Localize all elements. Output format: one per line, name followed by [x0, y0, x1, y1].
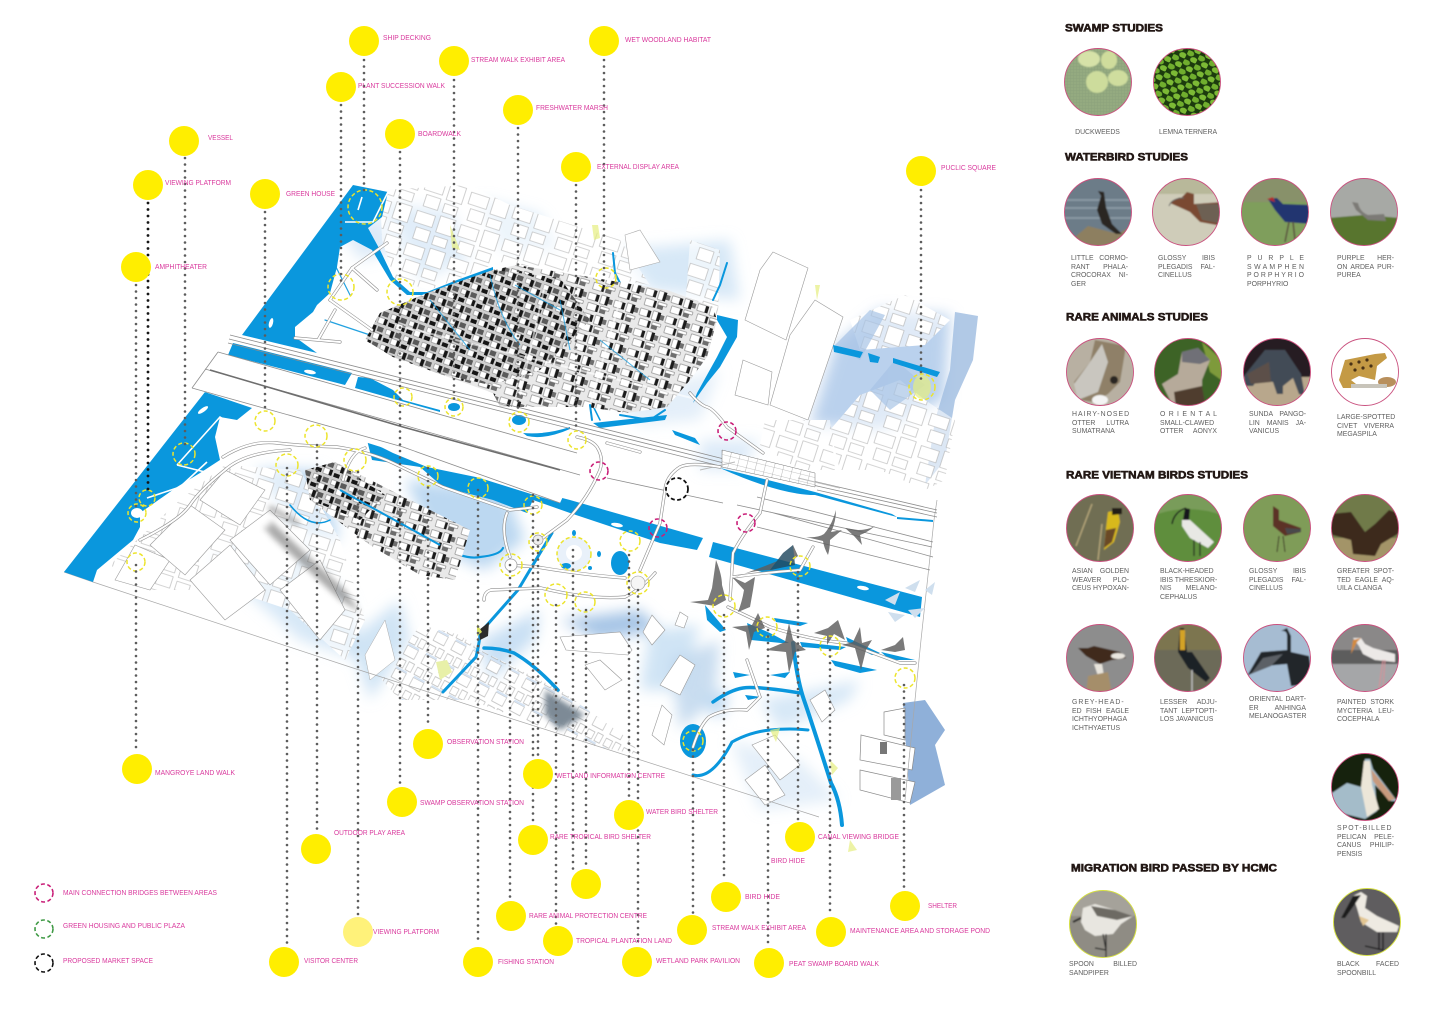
large white towers — [735, 252, 843, 420]
photo: oriental small-clawed otter — [1154, 338, 1222, 406]
caption: painted stork — [1337, 699, 1394, 723]
label: bird hide upper: BIRD HIDE — [771, 858, 805, 865]
caption: sunda pangolin: LIN MANIS JA- — [1249, 420, 1306, 427]
caption: greater spotted eagle: UILA CLANGA — [1337, 585, 1382, 592]
callout: plant succession walk: PLANT SUCCESSION WALK — [358, 83, 445, 90]
soft building shadows — [210, 200, 950, 810]
callout: visitor center: VISITOR CENTER — [304, 958, 358, 965]
callout: stream walk exhibit area — [439, 46, 565, 76]
water: canals and tributaries — [290, 253, 842, 825]
caption: glossy ibis: CINELLUS — [1158, 272, 1192, 279]
callout: viewing platform lower — [343, 917, 439, 947]
caption: black-headed ibis: CEPHALUS — [1160, 594, 1197, 601]
callout: wetland information centre — [523, 759, 665, 789]
yellow-green highlight areas — [450, 225, 931, 852]
caption: glossy ibis second: PLEGADIS FAL- — [1249, 577, 1306, 584]
callout: canal viewing bridge — [785, 822, 899, 852]
callout: rare animal protection centre — [496, 901, 647, 931]
caption: greater spotted eagle: GREATER SPOT- — [1337, 568, 1394, 575]
photo: painted stork — [1331, 624, 1399, 692]
caption: grey-headed fish eagle: ED FISH EAGLE — [1072, 708, 1129, 715]
callout: plant succession walk — [326, 72, 445, 102]
caption: black faced spoonbill — [1337, 961, 1399, 977]
caption: oriental small-clawed otter: OTTER AONYX — [1160, 428, 1217, 435]
caption: little cormorant: RANT PHALA- — [1071, 264, 1128, 271]
callout: amphitheater — [121, 252, 207, 282]
caption: lemna ternera: LEMNA TERNERA — [1159, 129, 1217, 136]
dashed markers: main connection bridges — [590, 422, 755, 537]
caption: painted stork: COCEPHALA — [1337, 716, 1380, 723]
callout: amphitheater: AMPHITHEATER — [155, 264, 207, 271]
caption: spot-billed pelican — [1337, 825, 1394, 858]
heading: migration birds: MIGRATION BIRD PASSED BY HCMC — [1071, 862, 1277, 874]
caption: lesser adjutant: LESSER ADJU- — [1160, 699, 1217, 706]
caption: black faced spoonbill: SPOONBILL — [1337, 970, 1376, 977]
callout: stream walk exhibit area lower — [677, 915, 806, 945]
water: north-west lagoon — [242, 185, 493, 353]
caption: grey-headed fish eagle: GREY-HEAD- — [1072, 699, 1125, 706]
caption: hairy-nosed otter: OTTER LUTRA — [1072, 420, 1129, 427]
caption: spoon billed sandpiper — [1069, 961, 1137, 977]
callout: viewing platform lower: VIEWING PLATFORM — [373, 929, 439, 936]
caption: spoon billed sandpiper: SANDPIPER — [1069, 970, 1109, 977]
pavilion arc — [560, 632, 632, 655]
water: central river — [367, 440, 703, 550]
callout: public square — [906, 156, 996, 186]
callout: vessel — [169, 126, 233, 156]
panel: species studies sidebar — [1062, 22, 1403, 960]
legend — [35, 884, 217, 972]
white boats — [131, 318, 869, 591]
heading: rare vietnam birds studies: RARE VIETNAM BIRDS STUDIES — [1066, 470, 1248, 482]
caption: greater spotted eagle — [1337, 568, 1394, 592]
callout: vessel: VESSEL — [208, 135, 233, 142]
caption: lesser adjutant: LOS JAVANICUS — [1160, 716, 1213, 723]
callout: stream walk exhibit area: STREAM WALK EXHIBIT AREA — [471, 57, 565, 64]
callout: peat swamp board walk: PEAT SWAMP BOARD WALK — [789, 961, 879, 968]
callout: peat swamp board walk — [754, 948, 879, 978]
caption: sunda pangolin: SUNDA PANGO- — [1249, 411, 1306, 418]
caption: grey-headed fish eagle: ICHTHYOPHAGA — [1072, 716, 1127, 723]
caption: lesser adjutant: TANT LEPTOPTI- — [1160, 708, 1217, 715]
callout: water bird shelter — [614, 800, 718, 830]
caption: asian golden weaver: CEUS HYPOXAN- — [1072, 585, 1129, 592]
caption: oriental small-clawed otter: SMALL-CLAWED — [1160, 420, 1214, 427]
water: thin strip by road — [355, 377, 440, 412]
callout: bird hide — [711, 882, 780, 912]
callout: rare tropical bird shelter — [518, 825, 651, 855]
caption: glossy ibis — [1158, 255, 1215, 279]
callout: fishing station: FISHING STATION — [498, 959, 554, 966]
callout: boardwalk — [385, 119, 461, 149]
caption: purple heron: PURPLE HER- — [1337, 255, 1394, 262]
leader lines — [136, 60, 921, 945]
caption: spot-billed pelican: CANUS PHILIP- — [1337, 842, 1394, 849]
callout: green house — [250, 179, 335, 209]
photo: hairy-nosed otter — [1066, 338, 1134, 406]
caption: oriental darter — [1249, 696, 1306, 720]
callout: external display area — [561, 152, 679, 182]
callout: tropical plantation land: TROPICAL PLANTATION LAND — [576, 938, 672, 945]
caption: oriental small-clawed otter — [1160, 411, 1217, 435]
callout: swamp observation station: SWAMP OBSERVATION STATION — [420, 800, 524, 807]
photo: little cormorant — [1064, 178, 1132, 246]
bridge plaza grid — [722, 450, 815, 487]
panel: axonometric wetland site map — [64, 185, 978, 852]
photo: black faced spoonbill — [1333, 888, 1401, 956]
callout: freshwater marsh — [503, 95, 608, 125]
water: ponds — [611, 551, 629, 575]
dashed marker: proposed market space — [666, 478, 688, 500]
caption: purple heron — [1337, 255, 1394, 279]
callout: water bird shelter: WATER BIRD SHELTER — [646, 809, 718, 816]
dense housing cluster: north — [365, 265, 717, 413]
photo: black-headed ibis — [1154, 494, 1222, 562]
heading: rare animals studies: RARE ANIMALS STUDIES — [1066, 312, 1208, 324]
caption: glossy ibis second: CINELLUS — [1249, 585, 1283, 592]
callout: wetland park pavilion — [622, 947, 740, 977]
caption: large-spotted civet: LARGE-SPOTTED — [1337, 414, 1395, 421]
hard shadows right side — [925, 312, 978, 485]
callout: fishing station — [463, 947, 554, 977]
callout: canal viewing bridge: CANAL VIEWING BRIDGE — [818, 834, 899, 841]
dashed markers: housing and plaza nodes — [127, 190, 935, 751]
caption: grey-headed fish eagle — [1072, 699, 1129, 732]
callout: outdoor play area — [301, 830, 405, 864]
callout: rare animal protection centre: RARE ANIMAL PROTECTION CENTRE — [529, 913, 647, 920]
caption: lesser adjutant — [1160, 699, 1217, 723]
south city blocks — [382, 625, 640, 755]
caption: oriental small-clawed otter: O R I E N T A L — [1160, 411, 1217, 418]
photo: purple swamphen — [1241, 178, 1309, 246]
light-outlined building blocks: north — [380, 185, 650, 290]
caption: black-headed ibis — [1160, 568, 1217, 601]
legend item: proposed market space — [35, 954, 153, 972]
callout: wetland information centre: WETLAND INFORMATION CENTRE — [556, 773, 665, 780]
caption: glossy ibis second: GLOSSY IBIS — [1249, 568, 1306, 575]
legend item: green housing and public plaza — [35, 920, 185, 938]
callout: external display area: EXTERNAL DISPLAY AREA — [597, 164, 679, 171]
callout: observation station: OBSERVATION STATION — [447, 739, 524, 746]
callout: maintenance area and storage pond — [816, 917, 990, 947]
photo: grey-headed fish eagle — [1066, 624, 1134, 692]
callout: wet woodland habitat — [589, 26, 712, 56]
legend item: main connection bridges — [35, 884, 217, 902]
callout: mangrove land walk — [122, 754, 235, 784]
caption: greater spotted eagle: TED EAGLE AQ- — [1337, 577, 1394, 584]
caption: purple swamphen — [1247, 255, 1304, 288]
photo: spot-billed pelican — [1331, 753, 1399, 821]
water: lagoon strip — [228, 343, 352, 385]
caption: asian golden weaver — [1072, 568, 1129, 592]
water: west river — [64, 392, 252, 582]
site edge lines — [64, 500, 937, 817]
caption: oriental darter: ER ANHINGA — [1249, 705, 1306, 712]
caption: purple swamphen: S W A M P H E N — [1247, 264, 1304, 271]
caption: asian golden weaver: ASIAN GOLDEN — [1072, 568, 1129, 575]
caption: large-spotted civet: MEGASPILA — [1337, 431, 1377, 438]
callout: ship decking: SHIP DECKING — [383, 35, 431, 42]
pale distant birds — [885, 580, 935, 622]
caption: purple swamphen: P U R P L E — [1247, 255, 1304, 262]
callout: wet woodland habitat: WET WOODLAND HABITAT — [625, 37, 712, 44]
caption: purple heron: ON ARDEA PUR- — [1337, 264, 1394, 271]
caption: glossy ibis: GLOSSY IBIS — [1158, 255, 1215, 262]
photo: greater spotted eagle — [1331, 494, 1399, 562]
callout: shelter — [890, 891, 957, 921]
callout: rare tropical bird shelter: RARE TROPICAL BIRD SHELTER — [550, 834, 651, 841]
caption: grey-headed fish eagle: ICHTHYAETUS — [1072, 725, 1120, 732]
callout: stream walk exhibit area lower: STREAM WALK EXHIBIT AREA — [712, 925, 806, 932]
callout: visitor center — [269, 947, 358, 977]
callout: bird hide: BIRD HIDE — [745, 894, 780, 901]
callout: ship decking — [349, 26, 431, 56]
callout: viewing platform: VIEWING PLATFORM — [165, 180, 231, 187]
callout: viewing platform — [133, 170, 231, 200]
callout: outdoor play area: OUTDOOR PLAY AREA — [334, 830, 405, 837]
photo: lesser adjutant — [1154, 624, 1222, 692]
caption: large-spotted civet: CIVET VIVERRA — [1337, 423, 1394, 430]
callout: tropical plantation land — [543, 926, 672, 956]
photo: sunda pangolin — [1243, 338, 1311, 406]
photo: purple heron — [1330, 178, 1398, 246]
callout: observation station — [413, 729, 524, 759]
photo: spoon billed sandpiper — [1069, 890, 1137, 958]
callout: mangrove land walk: MANGROYE LAND WALK — [155, 770, 235, 777]
dense housing cluster: south — [305, 462, 470, 580]
callout: swamp observation station — [387, 787, 524, 817]
callout: boardwalk: BOARDWALK — [418, 131, 461, 138]
caption: glossy ibis second — [1249, 568, 1306, 592]
caption: sunda pangolin: VANICUS — [1249, 428, 1279, 435]
legend item: proposed market space: PROPOSED MARKET SPACE — [63, 958, 153, 965]
callout: public square: PUCLIC SQUARE — [941, 165, 996, 172]
caption: hairy-nosed otter — [1072, 411, 1130, 435]
caption: hairy-nosed otter: HAIRY-NOSED — [1072, 411, 1130, 418]
caption: painted stork: MYCTERIA LEU- — [1337, 708, 1394, 715]
caption: purple swamphen: PORPHYRIO — [1247, 281, 1288, 288]
callout: freshwater marsh: FRESHWATER MARSH — [536, 105, 608, 112]
photo: oriental darter — [1243, 624, 1311, 692]
caption: spoon billed sandpiper: SPOON BILLED — [1069, 961, 1137, 968]
heading: waterbird studies: WATERBIRD STUDIES — [1065, 152, 1188, 164]
bird flock silhouettes — [690, 510, 905, 673]
south-west city blocks — [110, 465, 365, 660]
caption: glossy ibis: PLEGADIS FAL- — [1158, 264, 1215, 271]
flower garden with pools — [477, 530, 645, 640]
callout: wetland park pavilion: WETLAND PARK PAVILION — [656, 958, 740, 965]
caption: painted stork: PAINTED STORK — [1337, 699, 1394, 706]
caption: spot-billed pelican: PENSIS — [1337, 851, 1362, 858]
photo: lemna ternera — [1153, 48, 1221, 116]
photo: glossy ibis green — [1243, 494, 1311, 562]
heading: swamp studies: SWAMP STUDIES — [1065, 22, 1163, 34]
south-east large buildings — [860, 708, 915, 803]
caption: black faced spoonbill: BLACK FACED — [1337, 961, 1399, 968]
caption: oriental darter: MELANOGASTER — [1249, 713, 1306, 720]
callout: unlabelled node — [571, 869, 601, 899]
legend item: green housing and public plaza: GREEN HOUSING AND PUBLIC PLAZA — [63, 923, 185, 930]
callout: maintenance area and storage pond: MAINTENANCE AREA AND STORAGE POND — [850, 928, 990, 935]
caption: little cormorant: GER — [1071, 281, 1086, 288]
caption: hairy-nosed otter: SUMATRANA — [1072, 428, 1115, 435]
caption: black-headed ibis: IBIS THRESKIOR- — [1160, 577, 1217, 584]
caption: spot-billed pelican: SPOT-BILLED — [1337, 825, 1392, 832]
water: blue channels and rivers — [64, 185, 940, 758]
caption: black-headed ibis: NIS MELANO- — [1160, 585, 1217, 592]
caption: spot-billed pelican: PELICAN PELE- — [1337, 834, 1394, 841]
caption: little cormorant: CROCORAX NI- — [1071, 272, 1128, 279]
photo: duckweeds — [1064, 48, 1132, 116]
caption: little cormorant: LITTLE CORMO- — [1071, 255, 1128, 262]
walkways and bridges — [140, 243, 915, 747]
caption: black-headed ibis: BLACK-HEADED — [1160, 568, 1214, 575]
caption: little cormorant — [1071, 255, 1128, 288]
photo: glossy ibis — [1152, 178, 1220, 246]
road and rail corridor — [192, 335, 937, 570]
caption: duckweeds: DUCKWEEDS — [1075, 129, 1120, 136]
callout: shelter: SHELTER — [928, 903, 957, 910]
caption: asian golden weaver: WEAVER PLO- — [1072, 577, 1129, 584]
caption: large-spotted civet — [1337, 414, 1395, 438]
photo: asian golden weaver — [1066, 494, 1134, 562]
caption: oriental darter: ORIENTAL DART- — [1249, 696, 1306, 703]
callouts: leader lines, yellow dots and labels — [35, 26, 996, 978]
callout: green house: GREEN HOUSE — [286, 191, 335, 198]
legend item: main connection bridges: MAIN CONNECTION BRIDGES BETWEEN AREAS — [63, 890, 217, 897]
caption: purple heron: PUREA — [1337, 272, 1361, 279]
caption: purple swamphen: P O R P H Y R I O — [1247, 272, 1304, 279]
east city blocks — [830, 380, 955, 490]
photo: large-spotted civet — [1331, 338, 1399, 406]
water: east river — [709, 542, 922, 617]
caption: sunda pangolin — [1249, 411, 1306, 435]
